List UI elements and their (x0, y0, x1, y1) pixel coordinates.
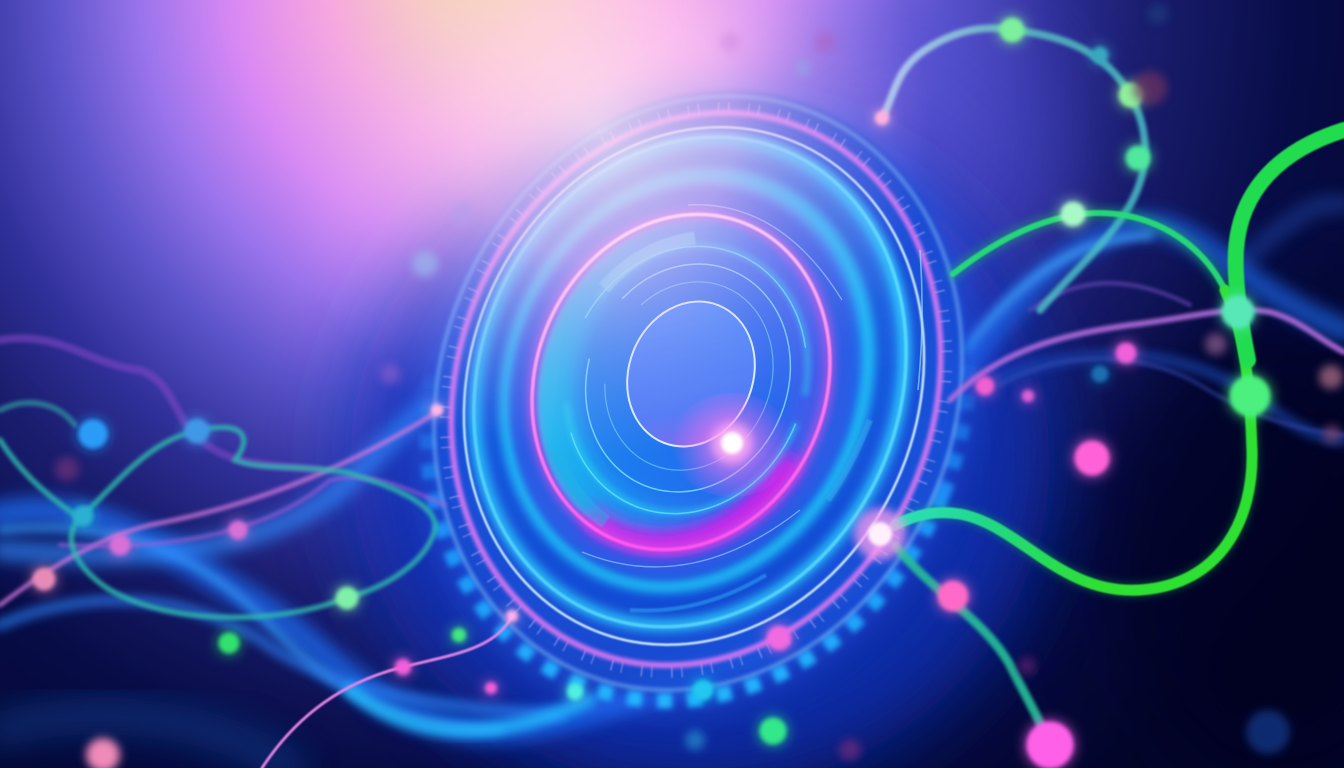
white outer ring (387, 57, 1001, 715)
cyan middle ring glow (445, 120, 929, 642)
flowing blue waves, right (960, 204, 1344, 440)
outer halo (325, 0, 1071, 768)
magenta and purple lines (0, 283, 1344, 768)
pink outer arc (370, 38, 1022, 740)
darker shade of blue band (426, 101, 950, 667)
ring system (325, 0, 1071, 768)
concentric arcs (526, 210, 846, 550)
inner ring shading (540, 223, 834, 535)
cyan thick ring glow (404, 74, 976, 690)
segment bars (556, 205, 922, 611)
teal and green lines (0, 28, 1145, 745)
thick green line (895, 130, 1344, 590)
pink ring glow (483, 169, 879, 595)
pink ring (483, 169, 879, 595)
bright white-pink flare (854, 508, 906, 560)
white inner ring (606, 282, 776, 466)
magenta glow lower right (670, 393, 794, 497)
pink nodes (33, 111, 1136, 768)
magenta crescent (494, 179, 868, 585)
outer disc (339, 9, 1057, 768)
pale outer arc upper right (346, 16, 1050, 768)
bright flare (712, 423, 752, 463)
cyan thick ring (402, 72, 978, 692)
central core (606, 283, 776, 467)
cyan inner ring glow (527, 209, 847, 549)
dark band inside cyan (452, 134, 914, 630)
dashed blue outer band (336, 7, 1060, 768)
flowing blue waves, left and bottom (0, 395, 760, 768)
tick marks band (362, 32, 1030, 748)
main blue disc (398, 68, 982, 696)
inner blue disc (488, 173, 876, 591)
green nodes (219, 18, 1270, 744)
